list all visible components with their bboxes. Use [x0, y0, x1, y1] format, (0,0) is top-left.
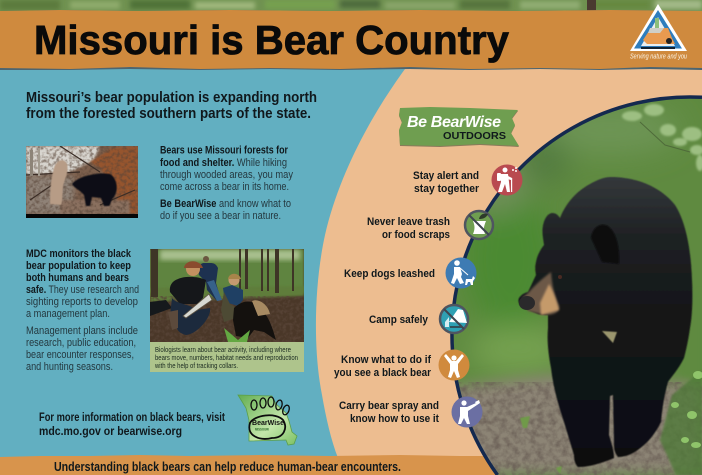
bottom message: Understanding black bears can help reduce human-bear encounters. — [54, 460, 401, 474]
BearWise Missouri logo — [238, 395, 297, 445]
photo caption: Biologists learn about bear activity, including where — [155, 347, 291, 354]
text: forests and shelter: through wooded areas, you may — [160, 169, 293, 181]
tip: bear spray: know how to use it — [350, 413, 439, 425]
intro heading — [26, 90, 317, 122]
text: monitoring: bear population to keep — [26, 260, 131, 272]
text: monitoring — [26, 248, 139, 373]
title: Missouri is Bear Country — [34, 17, 509, 63]
Be BearWise banner — [399, 107, 519, 147]
intro heading: Missouri’s bear population is expanding north — [26, 90, 317, 106]
icon: tent — [440, 305, 468, 333]
photo: two bears in forest — [26, 146, 138, 218]
photo: biologists with bear — [150, 249, 304, 342]
intro heading: from the forested southern parts of the state. — [26, 106, 311, 122]
more information — [39, 412, 225, 438]
tip: stay alert: stay together — [414, 183, 480, 195]
tip: stay alert — [413, 164, 522, 196]
circular bear photo — [440, 90, 702, 475]
text: monitoring: safe. They use research and — [26, 284, 139, 296]
photo caption — [150, 342, 304, 372]
photo caption: bears move, numbers, habitat needs and reproduction — [155, 355, 298, 362]
text: monitoring: bear encounter responses, — [26, 349, 134, 361]
tip: trash: or food scraps — [382, 229, 450, 241]
tip: stay alert: Stay alert and — [413, 170, 479, 182]
MDC logo: Serving nature and you — [630, 54, 687, 60]
tip: trash: Never leave trash — [367, 216, 450, 228]
tip: camp: Camp safely — [369, 314, 429, 326]
text: monitoring: both humans and bears — [26, 272, 129, 284]
text: monitoring: Management plans include — [26, 325, 138, 337]
text: forests and shelter: food and shelter. While hiking — [160, 157, 287, 169]
bottom banner — [0, 455, 520, 475]
tip: dogs — [344, 258, 476, 288]
black bear — [518, 177, 692, 467]
text: forests and shelter — [160, 144, 293, 222]
icon: dog walker — [446, 258, 476, 288]
tip: camp — [369, 305, 468, 333]
text: monitoring: a management plan. — [26, 308, 110, 320]
text: monitoring: MDC monitors the black — [26, 248, 132, 260]
text: monitoring: sighting reports to develop — [26, 296, 138, 308]
text: forests and shelter: do if you see a bear in nature. — [160, 210, 281, 222]
circle border — [452, 97, 702, 475]
peach panel — [316, 69, 702, 475]
photo caption: with the help of tracking collars. — [154, 363, 238, 370]
title banner — [0, 10, 702, 70]
icon: person arms raised — [438, 350, 470, 380]
BearWise Missouri logo: MISSOURI — [255, 428, 269, 432]
icon: person spraying — [452, 396, 482, 428]
more information: mdc.mo.gov or bearwise.org — [39, 424, 182, 438]
tip: encounter — [334, 350, 470, 380]
MDC logo — [630, 4, 687, 60]
tip: bear spray: Carry bear spray and — [339, 400, 439, 412]
more information: For more information on black bears, visit — [39, 412, 225, 424]
text: forests and shelter: come across a bear in its home. — [160, 181, 289, 193]
Be BearWise banner: OUTDOORS — [443, 131, 506, 142]
tip: encounter: you see a black bear — [334, 367, 432, 379]
tip: encounter: Know what to do if — [341, 354, 431, 366]
icon: hiker — [492, 164, 522, 196]
text: forests and shelter: Bears use Missouri forests for — [160, 144, 289, 156]
tip: trash — [367, 211, 493, 241]
text: monitoring: and hunting seasons. — [26, 361, 113, 373]
tip: bear spray — [339, 396, 482, 428]
Be BearWise banner: Be BearWise — [407, 114, 501, 131]
icon: no food scraps — [465, 211, 493, 239]
top photo strip — [0, 0, 702, 12]
text: forests and shelter: Be BearWise and know what to — [160, 198, 291, 210]
text: monitoring: research, public education, — [26, 337, 136, 349]
BearWise Missouri logo: BearWise — [252, 418, 284, 427]
tip: dogs: Keep dogs leashed — [344, 268, 435, 280]
